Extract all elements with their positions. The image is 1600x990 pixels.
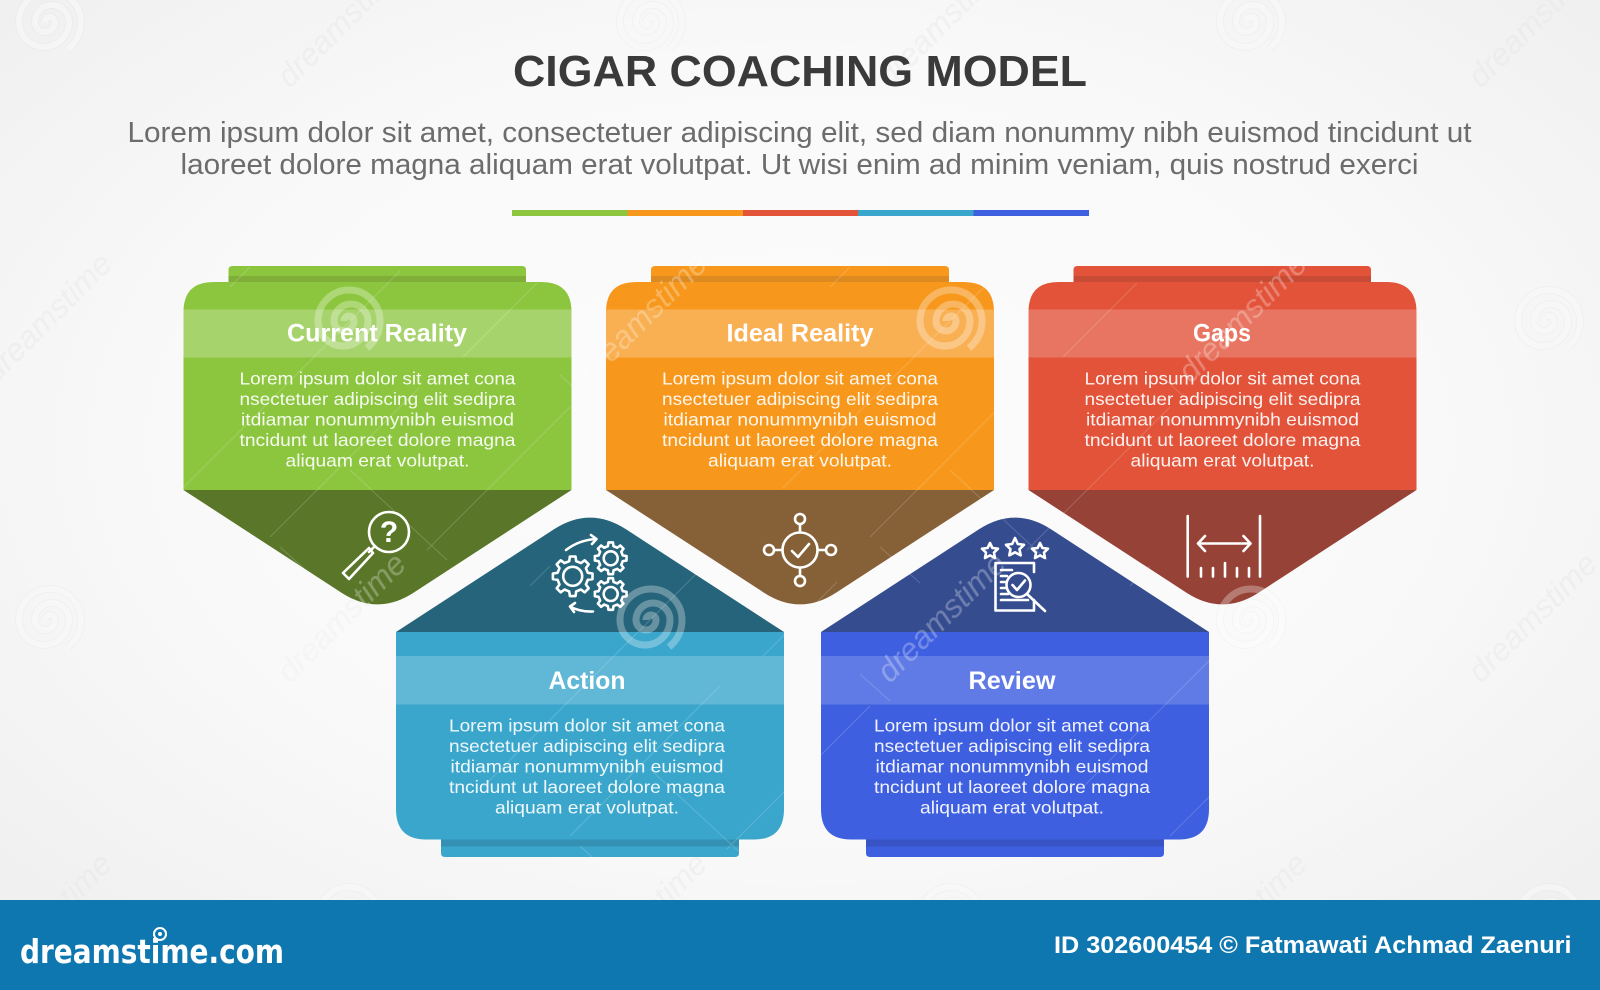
text block [662, 368, 938, 470]
panel: gaps [1028, 266, 1416, 604]
foreground watermark: dreamstime [1170, 245, 1314, 389]
text block: itdiamar nonummynibh euismod [1086, 410, 1359, 430]
panel: current reality [184, 266, 572, 604]
heading: ideal reality: Ideal Reality [726, 320, 874, 348]
foreground watermark: dreamstime [869, 545, 1013, 689]
icon: gears [553, 535, 627, 612]
text block: nsectetuer adipiscing elit sedipra [662, 389, 938, 409]
text block [1084, 368, 1361, 470]
text block [449, 716, 725, 818]
text block: itdiamar nonummynibh euismod [241, 410, 514, 430]
heading: gaps: Gaps [1193, 320, 1251, 348]
text block: aliquam erat volutpat. [495, 798, 679, 818]
text block: tncidunt ut laoreet dolore magna [240, 430, 516, 450]
text block: aliquam erat volutpat. [1130, 450, 1314, 470]
panel: ideal reality [606, 266, 994, 604]
footer credit: ID 302600454 © Fatmawati Achmad Zaenuri [1054, 932, 1572, 959]
text block: Lorem ipsum dolor sit amet cona [240, 368, 516, 388]
text block: aliquam erat volutpat. [920, 798, 1104, 818]
text block: nsectetuer adipiscing elit sedipra [449, 736, 725, 756]
heading: review: Review [968, 667, 1056, 695]
foreground watermark [183, 245, 1490, 882]
icon: magnifier with question mark [343, 512, 409, 579]
text block: aliquam erat volutpat. [286, 450, 470, 470]
footer logo: dreamstime.com [20, 932, 284, 971]
subtitle: laoreet dolore magna aliquam erat volutpat. Ut wisi enim ad minim veniam, quis nostrud exerci [180, 149, 1418, 181]
text block: Lorem ipsum dolor sit amet cona [449, 716, 725, 736]
icon: measuring gap [1188, 516, 1260, 576]
text block: itdiamar nonummynibh euismod [664, 410, 936, 430]
panel: action [396, 518, 784, 857]
text block: itdiamar nonummynibh euismod [876, 756, 1148, 776]
background watermark: dreamstime [1460, 545, 1600, 689]
text block: tncidunt ut laoreet dolore magna [874, 777, 1150, 797]
subtitle [128, 117, 1472, 181]
panel: review [821, 518, 1209, 857]
text block: tncidunt ut laoreet dolore magna [662, 430, 938, 450]
text block: aliquam erat volutpat. [708, 450, 892, 470]
text block: Lorem ipsum dolor sit amet cona [662, 368, 938, 388]
text block: itdiamar nonummynibh euismod [450, 756, 724, 776]
title: CIGAR COACHING MODEL [513, 47, 1087, 96]
text block: tncidunt ut laoreet dolore magna [449, 777, 725, 797]
background watermark: dreamstime [570, 845, 714, 989]
text block: tncidunt ut laoreet dolore magna [1084, 430, 1361, 450]
heading: action: Action [548, 667, 626, 695]
icon: target with check [764, 514, 836, 586]
subtitle: Lorem ipsum dolor sit amet, consectetuer adipiscing elit, sed diam nonummy nibh euismod tincidunt ut [128, 117, 1472, 149]
background watermark: dreamstime [269, 545, 413, 689]
text block: nsectetuer adipiscing elit sedipra [240, 389, 516, 409]
foreground watermark: dreamstime [269, 545, 413, 689]
colored divider [512, 210, 1089, 216]
footer bar [0, 900, 1600, 990]
icon: review document with stars [982, 538, 1048, 611]
text block: nsectetuer adipiscing elit sedipra [1084, 389, 1361, 409]
text block [240, 368, 516, 470]
icon: magnifier with question mark: ? [380, 516, 398, 549]
text block [874, 716, 1150, 818]
heading: current reality: Current Reality [287, 320, 467, 348]
text block: Lorem ipsum dolor sit amet cona [874, 716, 1150, 736]
text block: nsectetuer adipiscing elit sedipra [874, 736, 1150, 756]
foreground watermark: dreamstime [570, 245, 714, 389]
background watermark: dreamstime [1170, 845, 1314, 989]
text block: Lorem ipsum dolor sit amet cona [1084, 368, 1361, 388]
